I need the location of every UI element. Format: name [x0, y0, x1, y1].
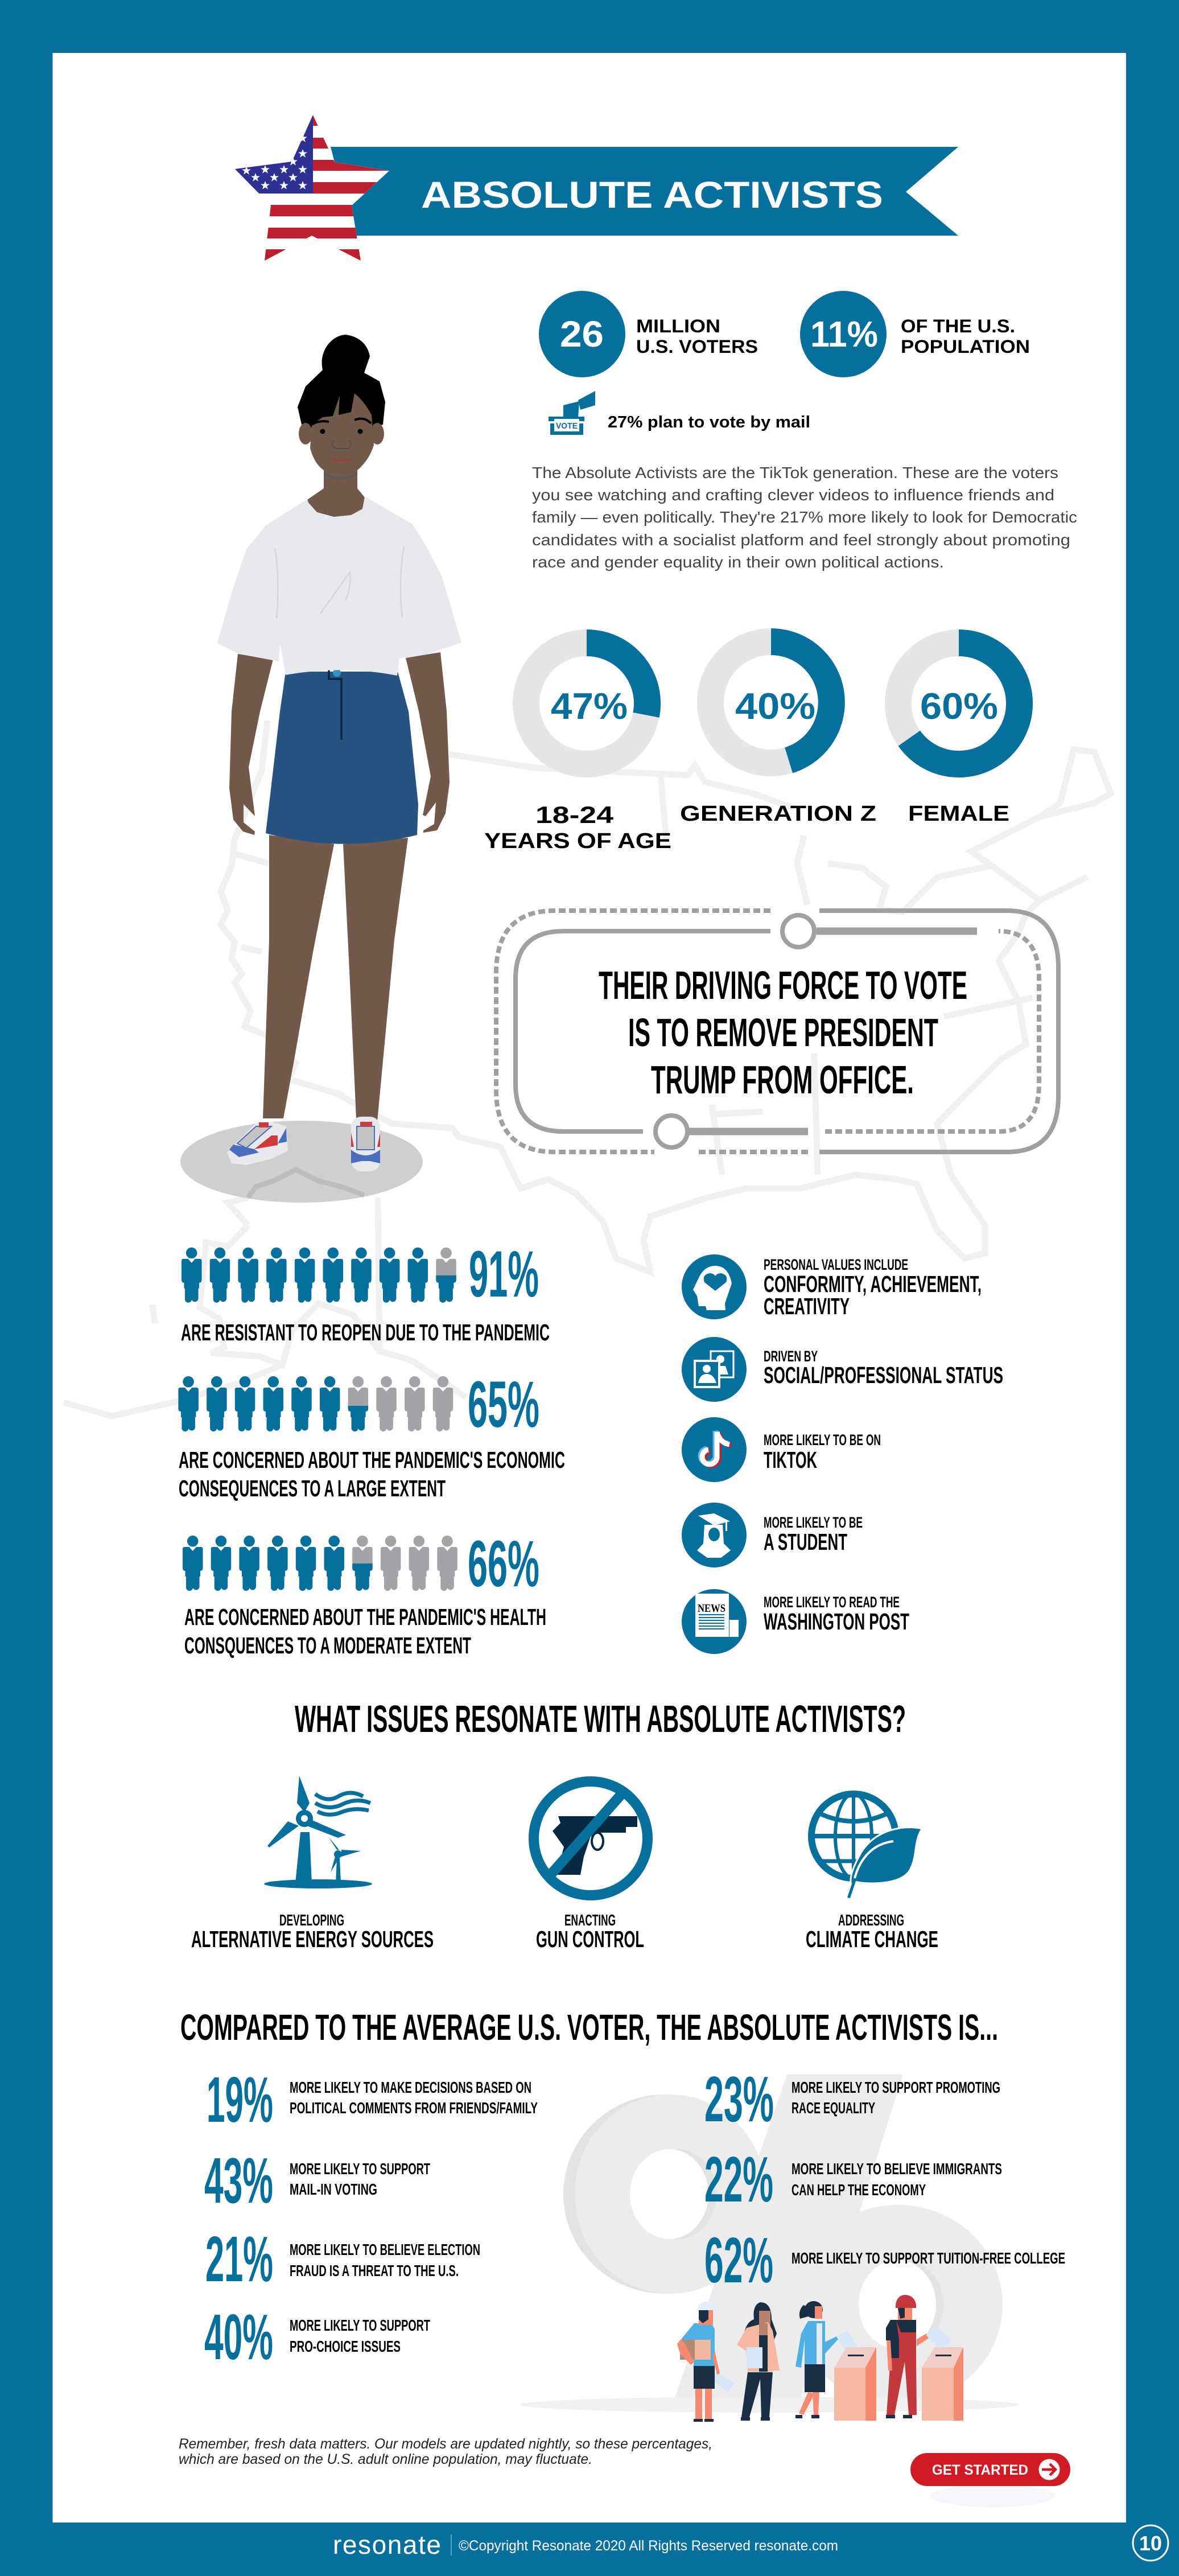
trait: student — [682, 1503, 863, 1567]
stat: 19%: MORE LIKELY TO MAKE DECISIONS BASED ON — [290, 2079, 531, 2096]
donut chart: 60% female: 60% — [920, 685, 998, 727]
button: get started — [910, 2453, 1070, 2507]
ballot box one — [834, 2347, 876, 2421]
trait: personal values: CONFORMITY, ACHIEVEMENT, — [764, 1271, 982, 1297]
description paragraph — [532, 464, 1077, 571]
stat: 26 million U.S. voters — [539, 291, 758, 377]
description paragraph: family — even politically. They're 217% more likely to look for Democratic — [532, 508, 1077, 526]
stat: 23%: 23% — [704, 2063, 774, 2135]
stat: 11% of the U.S. population: OF THE U.S. — [901, 316, 1015, 336]
icon: American flag star — [235, 115, 389, 261]
footnote: Remember, fresh data matters. Our models are updated nightly, so these percentages, — [179, 2436, 712, 2452]
shirt — [217, 496, 461, 676]
background map of the USA — [64, 721, 1111, 1416]
pictogram row: 65% — [178, 1368, 565, 1501]
pictogram row: 66% — [183, 1528, 546, 1659]
issue: alternative energy sources — [191, 1776, 434, 1952]
legs — [263, 835, 408, 1122]
stat: 26 million U.S. voters: 26 — [560, 314, 604, 355]
trait: Washington Post: WASHINGTON POST — [764, 1608, 909, 1635]
description paragraph: candidates with a socialist platform and feel strongly about promoting — [532, 531, 1070, 549]
vote by mail text: 27% plan to vote by mail — [608, 413, 810, 431]
face — [310, 393, 374, 477]
stat: 40%: MORE LIKELY TO SUPPORT — [290, 2316, 430, 2334]
trait: social status — [682, 1337, 1003, 1402]
big grey percent sign — [563, 2075, 1003, 2404]
stat: 43%: MORE LIKELY TO SUPPORT — [290, 2160, 430, 2178]
pictogram row: 66%: CONSQUENCES TO A MODERATE EXTENT — [184, 1632, 471, 1659]
stat: 43% — [204, 2145, 430, 2216]
page number — [1133, 2525, 1168, 2561]
footnote — [179, 2436, 712, 2467]
ballot box two — [922, 2347, 963, 2421]
stat: 21%: MORE LIKELY TO BELIEVE ELECTION — [290, 2241, 480, 2258]
neck — [307, 467, 365, 519]
illustration: young woman standing — [180, 335, 461, 1203]
trait: Washington Post — [682, 1589, 909, 1654]
donut chart: 40% generation Z: GENERATION Z — [680, 802, 876, 826]
stat: 21%: FRAUD IS A THREAT TO THE U.S. — [290, 2262, 459, 2279]
stat: 43%: MAIL-IN VOTING — [290, 2180, 377, 2198]
stat: 19% — [207, 2064, 538, 2135]
trait: personal values: PERSONAL VALUES INCLUDE — [764, 1256, 908, 1273]
donut chart: 60% female: FEMALE — [908, 802, 1009, 826]
footnote: which are based on the U.S. adult online population, may fluctuate. — [179, 2451, 592, 2467]
voter: construction worker — [886, 2295, 951, 2418]
stat: 62% — [704, 2224, 1065, 2296]
icon: ballot box: VOTE — [556, 421, 578, 431]
right shoe — [351, 1117, 380, 1171]
stat: 11% of the U.S. population: 11% — [810, 314, 878, 355]
voter: woman with long hair — [737, 2302, 780, 2421]
icon: ballot box — [549, 391, 595, 435]
description paragraph: you see watching and crafting clever videos to influence friends and — [532, 486, 1054, 504]
pictogram row: 66%: ARE CONCERNED ABOUT THE PANDEMIC'S HEALTH — [184, 1604, 546, 1630]
stat: 21% — [205, 2223, 480, 2295]
pictogram row: 65%: ARE CONCERNED ABOUT THE PANDEMIC'S ECONOMIC — [179, 1447, 565, 1473]
stat: 22%: CAN HELP THE ECONOMY — [792, 2181, 926, 2199]
stat: 11% of the U.S. population — [800, 291, 1030, 377]
stat: 23% — [704, 2063, 1000, 2135]
donut chart: 40% generation Z — [680, 642, 876, 826]
stat: 40%: 40% — [204, 2301, 273, 2373]
stat: 26 million U.S. voters: U.S. VOTERS — [636, 336, 758, 357]
donut chart: 47% 18-24 years of age: YEARS OF AGE — [484, 829, 671, 853]
trait: TikTok: MORE LIKELY TO BE ON — [764, 1431, 881, 1449]
icon: globe with leaf — [811, 1794, 921, 1898]
pictogram row: 91%: ARE RESISTANT TO REOPEN DUE TO THE PANDEMIC — [181, 1319, 550, 1345]
donut chart: 60% female — [898, 643, 1020, 826]
stat: 22%: 22% — [704, 2143, 773, 2215]
stat: 22% — [704, 2143, 1002, 2215]
trait: TikTok: TIKTOK — [764, 1447, 817, 1473]
trait: student: A STUDENT — [764, 1529, 847, 1555]
trait: Washington Post: NEWS — [698, 1602, 725, 1615]
trait: personal values — [682, 1254, 982, 1319]
button: get started: GET STARTED — [932, 2462, 1028, 2478]
pictogram row: 65%: 65% — [468, 1368, 539, 1441]
trait: TikTok — [682, 1417, 881, 1482]
stat: 23%: MORE LIKELY TO SUPPORT PROMOTING — [792, 2079, 1000, 2096]
stat: 40%: PRO-CHOICE ISSUES — [290, 2338, 401, 2355]
left shoe — [227, 1122, 288, 1165]
trait: social status: DRIVEN BY — [764, 1348, 818, 1365]
page number: 10 — [1139, 2532, 1162, 2555]
arms — [229, 652, 450, 835]
issue: alternative energy sources: ALTERNATIVE ENERGY SOURCES — [191, 1926, 434, 1952]
icon: wind turbines — [264, 1776, 372, 1888]
stat: 19%: 19% — [207, 2064, 273, 2135]
issue: gun control — [534, 1781, 648, 1952]
issue: climate change: CLIMATE CHANGE — [806, 1926, 938, 1952]
skirt — [266, 672, 418, 844]
pictogram row: 91% — [181, 1248, 550, 1341]
trait: social status: SOCIAL/PROFESSIONAL STATUS — [764, 1362, 1003, 1388]
donut chart: 47% 18-24 years of age: 18-24 — [535, 801, 614, 828]
ground shadow — [180, 1121, 423, 1203]
pictogram row: 91%: 91% — [469, 1238, 539, 1311]
issue: gun control: GUN CONTROL — [536, 1926, 644, 1952]
callout: driving force to vote — [496, 911, 1058, 1152]
donut chart: 47% 18-24 years of age — [484, 643, 671, 853]
footer: resonate — [333, 2530, 441, 2559]
trait: personal values: CREATIVITY — [764, 1293, 850, 1319]
banner ribbon — [331, 147, 958, 236]
issue: gun control: ENACTING — [564, 1911, 616, 1929]
stat: 21%: 21% — [205, 2223, 273, 2295]
stat: 40% — [204, 2301, 430, 2373]
description paragraph: race and gender equality in their own political actions. — [532, 553, 944, 571]
stat: 62%: 62% — [704, 2224, 773, 2296]
donut chart: 40% generation Z: 40% — [735, 685, 815, 727]
description paragraph: The Absolute Activists are the TikTok generation. These are the voters — [532, 464, 1058, 482]
donut chart: 47% 18-24 years of age: 47% — [551, 685, 628, 727]
stat: 22%: MORE LIKELY TO BELIEVE IMMIGRANTS — [792, 2160, 1002, 2178]
callout: driving force to vote: TRUMP FROM OFFICE. — [651, 1057, 914, 1102]
pictogram row: 66%: 66% — [468, 1528, 539, 1600]
pictogram row: 65%: CONSEQUENCES TO A LARGE EXTENT — [179, 1475, 446, 1501]
trait: Washington Post: MORE LIKELY TO READ THE — [764, 1594, 900, 1611]
illustration: voters queueing at ballot boxes — [677, 2295, 963, 2422]
stat: 23%: RACE EQUALITY — [792, 2099, 875, 2117]
title banner — [331, 147, 958, 236]
voter: delivery man — [677, 2302, 735, 2422]
trait: student: MORE LIKELY TO BE — [764, 1514, 863, 1531]
footer: ©Copyright Resonate 2020 All Rights Reserved resonate.com — [459, 2538, 838, 2554]
ground ellipse — [520, 2397, 1019, 2413]
bun and hair — [298, 335, 385, 428]
stat: 26 million U.S. voters: MILLION — [636, 316, 720, 336]
voter: woman with ponytail — [795, 2301, 858, 2418]
issue: climate change — [806, 1794, 938, 1952]
icon: crossed out handgun — [534, 1781, 648, 1895]
footer — [333, 2530, 838, 2559]
stat: 11% of the U.S. population: POPULATION — [901, 336, 1030, 357]
title text: ABSOLUTE ACTIVISTS — [421, 174, 883, 216]
stat: 19%: POLITICAL COMMENTS FROM FRIENDS/FAMILY — [290, 2099, 538, 2117]
issue: alternative energy sources: DEVELOPING — [279, 1911, 344, 1929]
callout: driving force to vote: IS TO REMOVE PRESIDENT — [628, 1010, 938, 1055]
issue: climate change: ADDRESSING — [838, 1911, 904, 1929]
stat: 43%: 43% — [204, 2145, 273, 2216]
